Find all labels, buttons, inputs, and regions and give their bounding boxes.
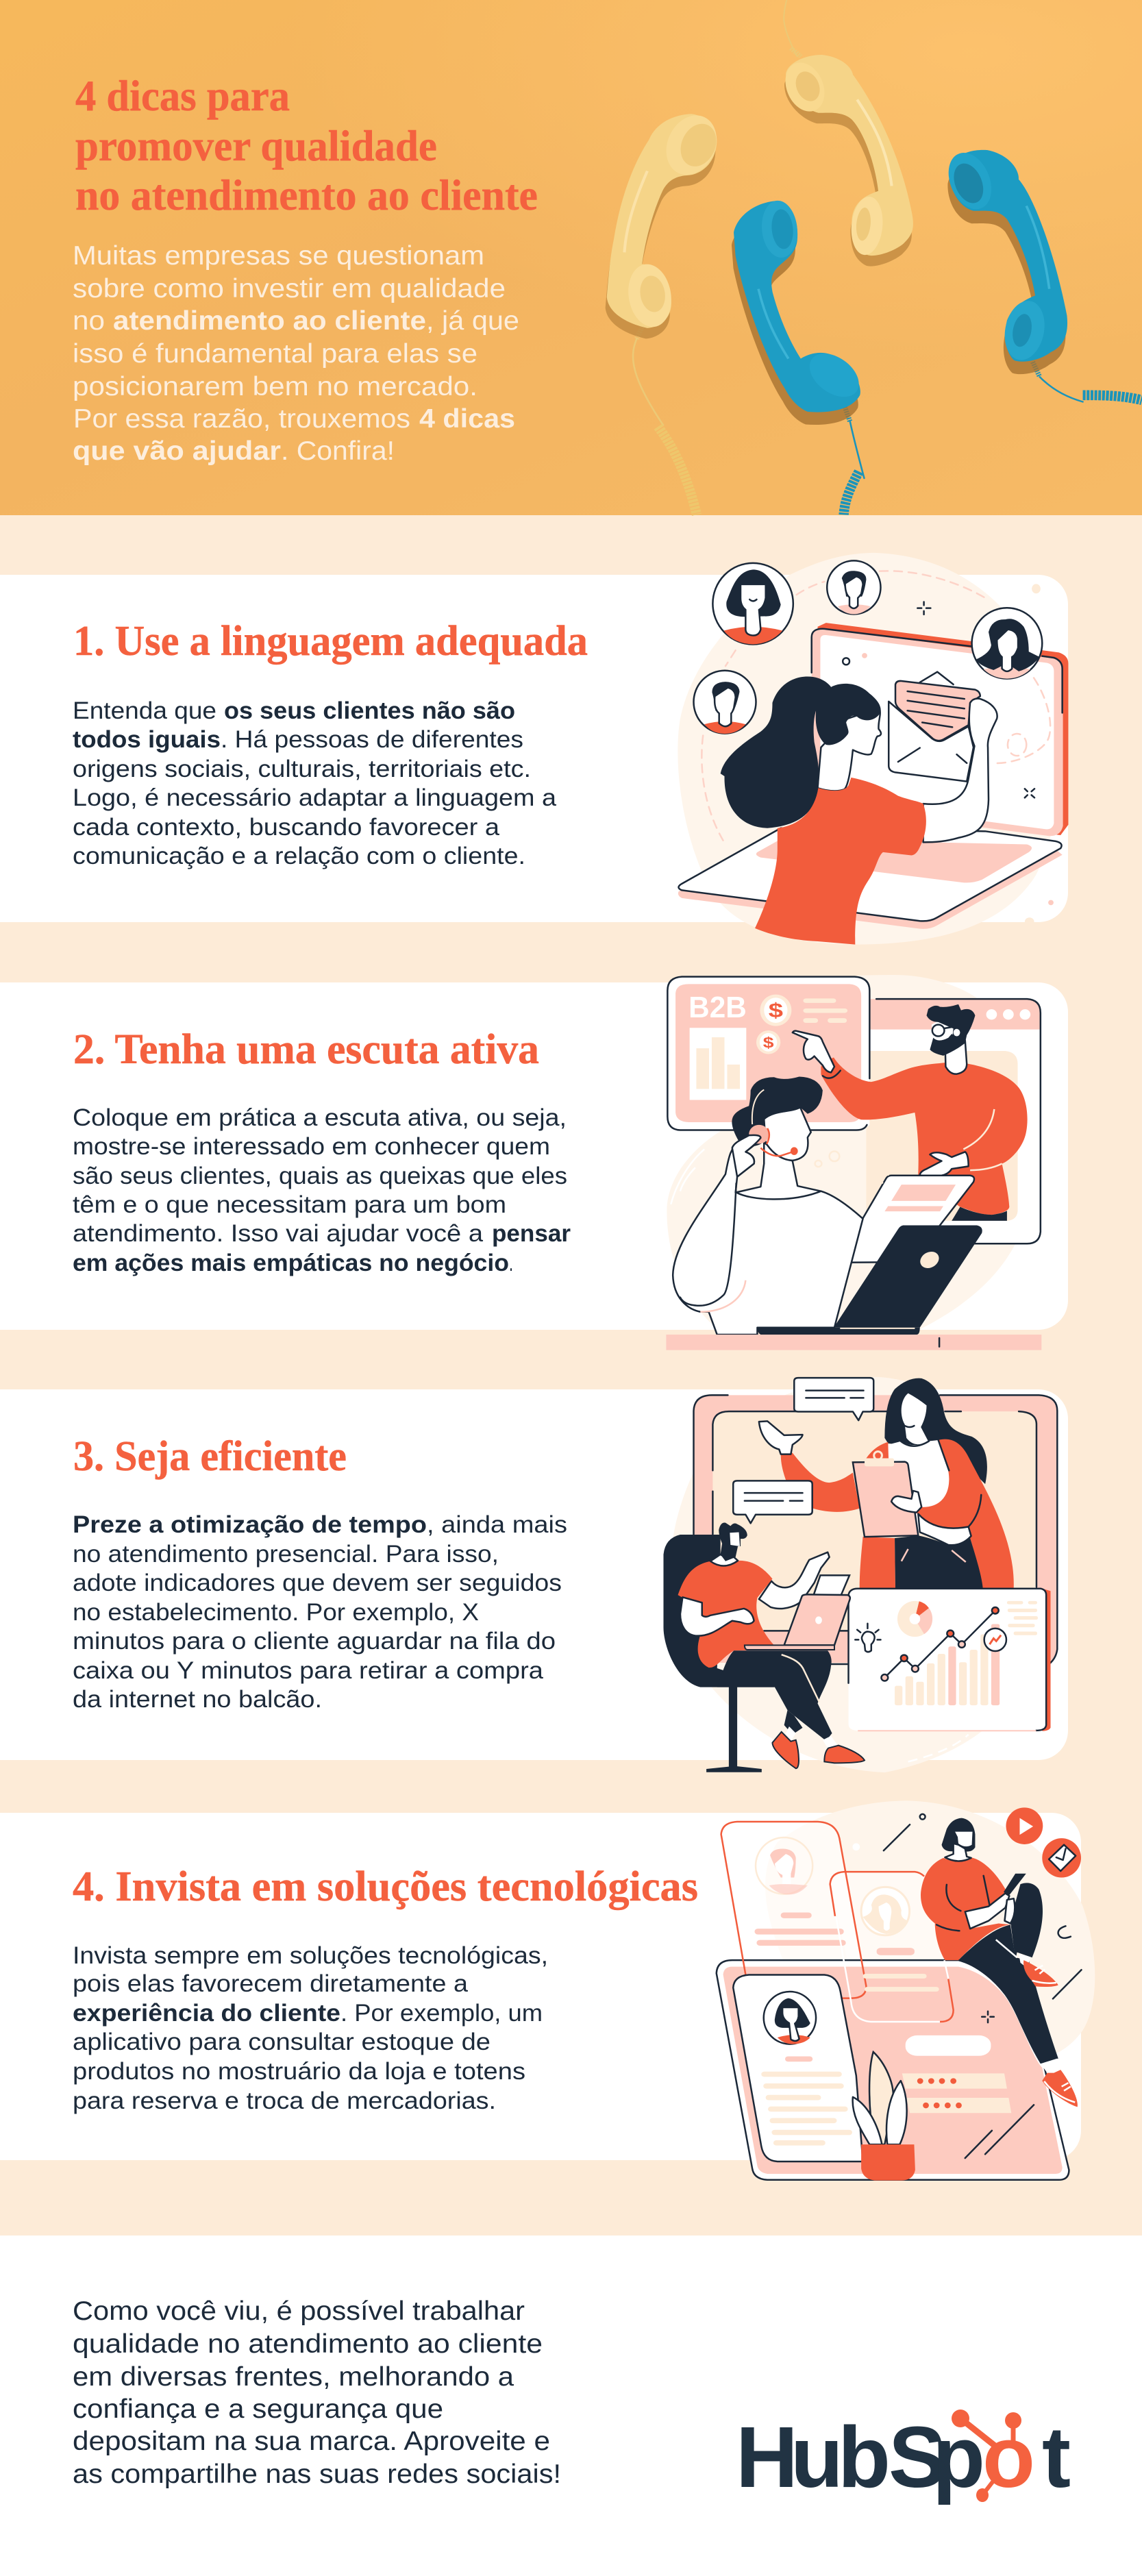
body text 4: . Por exemplo, um [340, 2000, 543, 2027]
body text 4: para reserva e troca de mercadorias. [73, 2088, 496, 2114]
hero intro text: isso é fundamental para elas se [73, 339, 477, 369]
HubSpot logo [736, 2409, 1071, 2505]
body text 3 [73, 1511, 567, 1713]
body text 2: têm e o que necessitam para um bom [73, 1191, 506, 1218]
illustration: customer app profiles [717, 1800, 1095, 2181]
body text 1: comunicação e a relação com o cliente. [73, 843, 525, 869]
closing text: confiança e a segurança que [73, 2394, 443, 2424]
body text 4 [73, 1942, 548, 2114]
tablet [840, 1164, 974, 1263]
body text 1: cada contexto, buscando favorecer a [73, 814, 500, 841]
handset: blue centre [732, 199, 867, 425]
body text 1: . Há pessoas de diferentes [221, 726, 523, 753]
panel: tip 3 [0, 1377, 1068, 1772]
B2B label: B2B [688, 990, 747, 1024]
sparkles [917, 602, 1034, 797]
speech bubble left [733, 1481, 812, 1523]
card background [0, 1813, 1081, 2160]
body text 2: atendimento. Isso vai ajudar você a [73, 1220, 484, 1247]
body text 3: minutos para o cliente aguardar na fila do [73, 1628, 556, 1655]
title [75, 71, 538, 219]
standing woman with clipboard [759, 1378, 1014, 1588]
decorative dots [1025, 584, 1054, 926]
avatar: man bottom left [694, 671, 756, 734]
woman's face and neck [818, 708, 881, 791]
logo wordmark: t [1042, 2409, 1071, 2505]
woman's hair [721, 677, 880, 828]
dashboard text lines [1007, 1601, 1038, 1635]
profile card two [830, 1872, 954, 2022]
dashed orbit lines [702, 571, 1050, 841]
body text 1 [73, 697, 557, 869]
B2B panel [667, 977, 869, 1130]
avatar [764, 1992, 816, 2044]
accent marks [884, 1824, 1082, 2158]
avatar: man top [827, 560, 880, 614]
panel: hero [0, 0, 1142, 515]
dashboard panel [849, 1589, 1051, 1731]
heading 3: 3. Seja eficiente [73, 1433, 347, 1480]
agent with headset [671, 1076, 863, 1335]
body text 2 [73, 1104, 571, 1276]
laptop base [678, 828, 1063, 929]
man in orange sweater [793, 1004, 1028, 1221]
card background [0, 575, 1068, 922]
title: promover qualidade [75, 121, 437, 170]
line chart [881, 1607, 999, 1681]
bar chart [895, 1624, 1000, 1705]
coin icons: $ [763, 1035, 774, 1052]
background blob [671, 1377, 1059, 1772]
hero intro text: posicionarem bem no mercado. [73, 372, 477, 401]
body text 3: Preze a otimização de tempo [73, 1511, 427, 1538]
body text 2: em ações mais empáticas no negócio [73, 1250, 509, 1276]
telephone cords [633, 0, 1142, 515]
hero intro text: sobre como investir em qualidade [73, 274, 506, 304]
icon: play button [1006, 1807, 1043, 1844]
laptop screen [812, 623, 1068, 836]
envelope and letter [889, 672, 980, 782]
body text 1: todos iguais [73, 726, 221, 753]
browser window [866, 999, 1041, 1243]
closing text: as compartilhe nas suas redes sociais! [73, 2460, 561, 2489]
closing text: qualidade no atendimento ao cliente [73, 2329, 543, 2359]
large tablet [717, 1960, 1069, 2180]
illustration: woman opening an envelope at a laptop [678, 553, 1068, 945]
illustration: support agent with headset and colleague [666, 975, 1041, 1350]
big window frame [694, 1395, 1057, 1664]
text lines [803, 998, 847, 1023]
hero intro text: no [73, 306, 105, 336]
body text 3: no estabelecimento. Por exemplo, X [73, 1599, 479, 1626]
hero intro text: Muitas empresas se questionam [73, 241, 484, 271]
panel: closing [0, 2236, 1142, 2576]
small marks [852, 1814, 926, 1850]
hero intro text: . Confira! [281, 436, 395, 466]
body text 3: da internet no balcão. [73, 1686, 322, 1713]
title: 4 dicas para [75, 71, 290, 120]
closing text [73, 2296, 561, 2489]
body text 1: origens sociais, culturais, territoriais etc. [73, 756, 531, 782]
body text 4: produtos no mostruário da loja e totens [73, 2058, 525, 2085]
closing text: depositam na sua marca. Aproveite e [73, 2427, 550, 2456]
closing background [0, 2236, 1142, 2576]
body text 3: , ainda mais [427, 1511, 567, 1538]
background blob [678, 553, 1059, 945]
body text 4: pois elas favorecem diretamente a [73, 1970, 469, 1997]
logo wordmark: o [982, 2409, 1035, 2505]
desk [666, 1335, 1041, 1350]
card background [0, 1389, 1068, 1760]
woman with smartphone [921, 1818, 1078, 2107]
icon: email [1042, 1838, 1081, 1878]
woman's shirt [755, 778, 926, 945]
heading 2: 2. Tenha uma escuta ativa [73, 1026, 539, 1073]
body text 1: Entenda que [73, 697, 216, 724]
panel: tip 4 [0, 1800, 1095, 2181]
speech bubble top [794, 1378, 873, 1420]
closing text: Como você viu, é possível trabalhar [73, 2296, 525, 2326]
phone with profile [733, 1975, 863, 2162]
body text 2: Coloque em prática a escuta ativa, ou seja, [73, 1104, 567, 1131]
body text 1: os seus clientes não são [224, 697, 515, 724]
closing text: em diversas frentes, melhorando a [73, 2362, 514, 2392]
background blob [765, 1800, 1095, 2055]
dashed circle [1008, 734, 1026, 756]
hero intro text: atendimento ao cliente [113, 306, 426, 336]
background blob [667, 975, 1019, 1330]
heading 4: 4. Invista em soluções tecnológicas [73, 1863, 698, 1910]
panel: tip 2 [0, 975, 1068, 1350]
hero orange background [0, 0, 1142, 515]
body text 2: . [509, 1250, 513, 1276]
card background [0, 982, 1068, 1330]
seated man with laptop [663, 1523, 865, 1772]
logo wordmark: HubSp [736, 2409, 985, 2505]
handset: blue right [941, 147, 1067, 374]
body text 2: pensar [492, 1220, 571, 1247]
coin icons [756, 995, 791, 1054]
body text 3: adote indicadores que devem ser seguidos [73, 1570, 562, 1596]
growth badge [984, 1628, 1006, 1651]
dashed floor line [908, 1735, 969, 1761]
hero intro text: , já que [426, 306, 519, 336]
hero intro text: 4 dicas [419, 404, 515, 434]
laptop [757, 1225, 982, 1335]
body text 4: experiência do cliente [73, 2000, 340, 2027]
login form [902, 2035, 1011, 2113]
panel: tip 1 [0, 553, 1068, 945]
hero intro text [73, 241, 519, 466]
body text 2: mostre-se interessado em conhecer quem [73, 1133, 550, 1160]
body text 4: Invista sempre em soluções tecnológicas, [73, 1942, 548, 1969]
coin icons: $ [769, 1000, 783, 1022]
body text 3: caixa ou Y minutos para retirar a compra [73, 1657, 544, 1684]
title: no atendimento ao cliente [75, 171, 538, 219]
body text 3: no atendimento presencial. Para isso, [73, 1541, 499, 1568]
illustration: four telephone handsets [606, 0, 1142, 515]
bar chart [690, 1028, 746, 1100]
donut chart [897, 1601, 932, 1637]
handset: yellow top [778, 55, 913, 267]
body text 2: são seus clientes, quais as queixas que eles [73, 1163, 567, 1189]
logo sprocket arms [952, 2410, 1021, 2502]
body text 4: aplicativo para consultar estoque de [73, 2029, 491, 2055]
icon: lightbulb [855, 1624, 880, 1652]
handset: yellow left [606, 109, 725, 338]
body text 1: Logo, é necessário adaptar a linguagem a [73, 784, 557, 811]
avatar: woman with bob [712, 563, 793, 644]
profile card one [721, 1822, 866, 1998]
heading 1: 1. Use a linguagem adequada [73, 618, 588, 665]
avatar: woman right [972, 608, 1042, 679]
plant [853, 2052, 915, 2181]
woman's raised arm [923, 699, 997, 842]
floating profile cards fill [721, 1822, 948, 1998]
hero intro text: que vão ajudar [73, 436, 281, 466]
illustration: team reviewing performance [663, 1377, 1059, 1772]
hero intro text: Por essa razão, trouxemos [73, 404, 410, 434]
